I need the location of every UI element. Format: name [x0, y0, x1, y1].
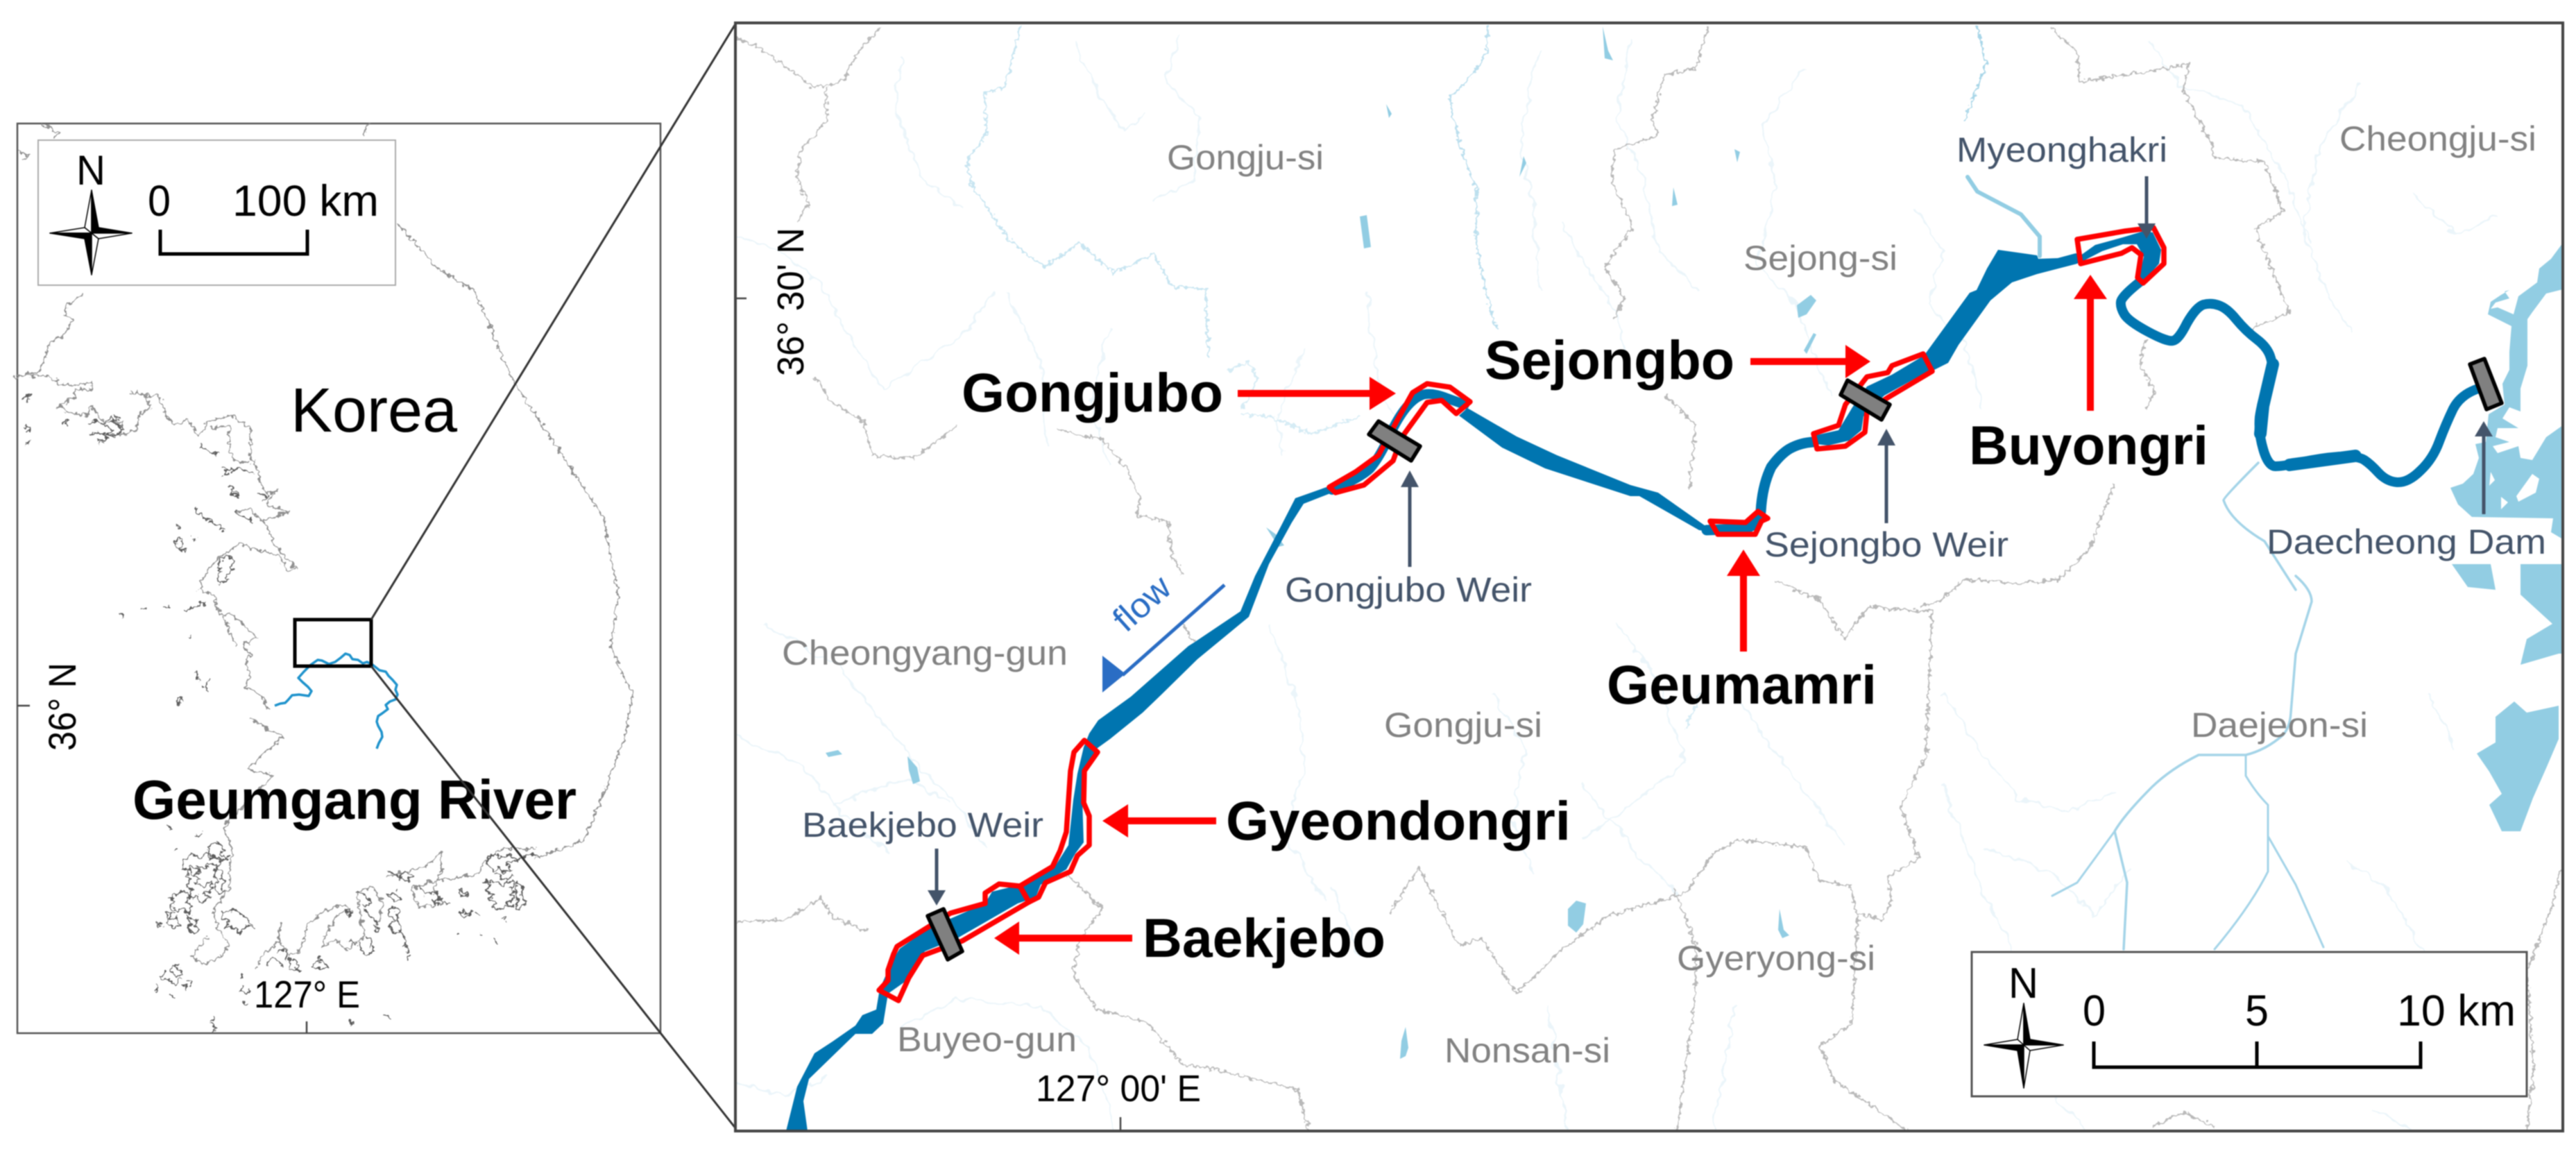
latitude label: 36 N: 36° N [40, 663, 84, 751]
small ponds [826, 26, 1816, 1059]
water bodies [826, 26, 2563, 1059]
label: Geumgang River: Geumgang River [133, 769, 577, 831]
site label: Geumamri [1607, 550, 1877, 715]
scale labels [2083, 987, 2516, 1035]
site outline: Sejongbo [1814, 354, 1932, 449]
site label: Geumamri: Geumamri [1607, 654, 1877, 715]
panel: Korea overview map [14, 124, 660, 1033]
river line in overview [275, 654, 398, 749]
weir: Gongjubo [1369, 421, 1420, 461]
panel: Geumgang River study map [733, 23, 2563, 1131]
place names: Gongju-si [1167, 138, 1324, 177]
scale bar [160, 230, 307, 254]
site outline: Gongjubo [1329, 384, 1470, 493]
site outline: Gyeondongri [1020, 740, 1098, 902]
scale bar [2094, 1042, 2421, 1067]
longitude label: 127 00 E: 127° 00' E [1036, 1068, 1201, 1110]
dam: Daecheong [2470, 359, 2502, 409]
longitude label: 127 E: 127° E [254, 973, 360, 1016]
place names: Buyeo-gun [897, 1020, 1077, 1059]
callout: Daecheong Dam [2267, 421, 2546, 561]
callout: Baekjebo Weir [802, 806, 1043, 906]
site label: Sejongbo: Sejongbo [1485, 329, 1734, 391]
tributary inflow near Myeonghakri [1968, 177, 2040, 256]
scale labels: 0 [2083, 987, 2106, 1035]
callout: Sejongbo Weir: Sejongbo Weir [1764, 525, 2008, 564]
latitude label: 36 N [17, 663, 84, 751]
site outline: Geumamri [1710, 511, 1768, 534]
river: Sejongbo wide reach [1814, 250, 2085, 445]
place names: Cheongyang-gun [782, 634, 1068, 672]
north label: N [2008, 960, 2038, 1008]
river: Buyongri bend [2081, 231, 2161, 281]
coastline of Korea [14, 124, 633, 967]
callout: Gongjubo Weir: Gongjubo Weir [1285, 570, 1532, 609]
place names: Daejeon-si [2191, 706, 2368, 745]
callout: Sejongbo Weir [1764, 429, 2008, 564]
latitude label: 36 30 N: 36° 30' N [770, 228, 812, 376]
Daejeon stream network [2052, 463, 2323, 949]
scale labels: 0 [148, 177, 171, 226]
flow direction arrow: flow [1105, 567, 1179, 639]
place names: Sejong-si [1743, 239, 1897, 278]
label: Korea: Korea [291, 376, 458, 445]
site label: Gongjubo [962, 362, 1396, 423]
site label: Gyeondongri: Gyeondongri [1226, 790, 1571, 851]
legend box: north arrow and 100 km scale [38, 140, 395, 285]
site outline: Baekjebo [879, 884, 1029, 1001]
offshore islands [22, 395, 540, 1032]
callout: Baekjebo Weir: Baekjebo Weir [802, 806, 1043, 844]
municipal boundaries [733, 26, 2561, 1131]
icon: compass rose [1984, 1003, 2063, 1088]
river channel [786, 231, 2161, 1131]
place names: Nonsan-si [1444, 1031, 1610, 1070]
weir: Sejongbo [1841, 380, 1890, 420]
place names: Gyeryong-si [1677, 939, 1875, 978]
callout: Myeonghakri: Myeonghakri [1956, 130, 2167, 169]
river: lower reach to Gongjubo [786, 487, 1332, 1131]
callout: Myeonghakri [1956, 130, 2167, 239]
scale labels [148, 177, 379, 226]
weir: Baekjebo [928, 909, 962, 960]
river: Gongjubo to Geumamri [1459, 408, 1714, 532]
site label: Baekjebo [994, 907, 1385, 969]
zoom connector lines [371, 23, 736, 1129]
callout: Gongjubo Weir [1285, 470, 1532, 609]
place names: Gongju-si [1384, 706, 1542, 745]
site label: Gongjubo: Gongjubo [962, 362, 1223, 423]
site label: Buyongri: Buyongri [1969, 414, 2208, 476]
icon: compass rose [50, 190, 132, 275]
callout: Daecheong Dam: Daecheong Dam [2267, 522, 2546, 561]
faint tributaries [737, 35, 2498, 1131]
white holes in reservoir [2489, 472, 2539, 509]
flow direction arrow [1102, 567, 1225, 692]
inset locator rectangle [295, 620, 371, 666]
scale labels: 100 km [232, 177, 379, 226]
site label: Sejongbo [1485, 329, 1870, 391]
site label: Buyongri [1969, 275, 2208, 476]
site outline: Buyongri [2077, 228, 2164, 283]
reservoir: Daecheong lake upper [2450, 243, 2563, 539]
scale labels: 10 km [2397, 987, 2516, 1035]
river thin sections [1332, 281, 2483, 530]
site label: Baekjebo: Baekjebo [1143, 907, 1385, 969]
legend box: north arrow and 10 km scale [1972, 952, 2527, 1096]
place names [782, 119, 2536, 1070]
reservoir: Daecheong lake lower [2452, 564, 2563, 831]
place names: Cheongju-si [2339, 119, 2536, 158]
map background layers [733, 26, 2563, 1131]
light blue tributaries and streams [967, 26, 1986, 729]
scale labels: 5 [2245, 987, 2269, 1035]
north label: N [76, 147, 105, 194]
